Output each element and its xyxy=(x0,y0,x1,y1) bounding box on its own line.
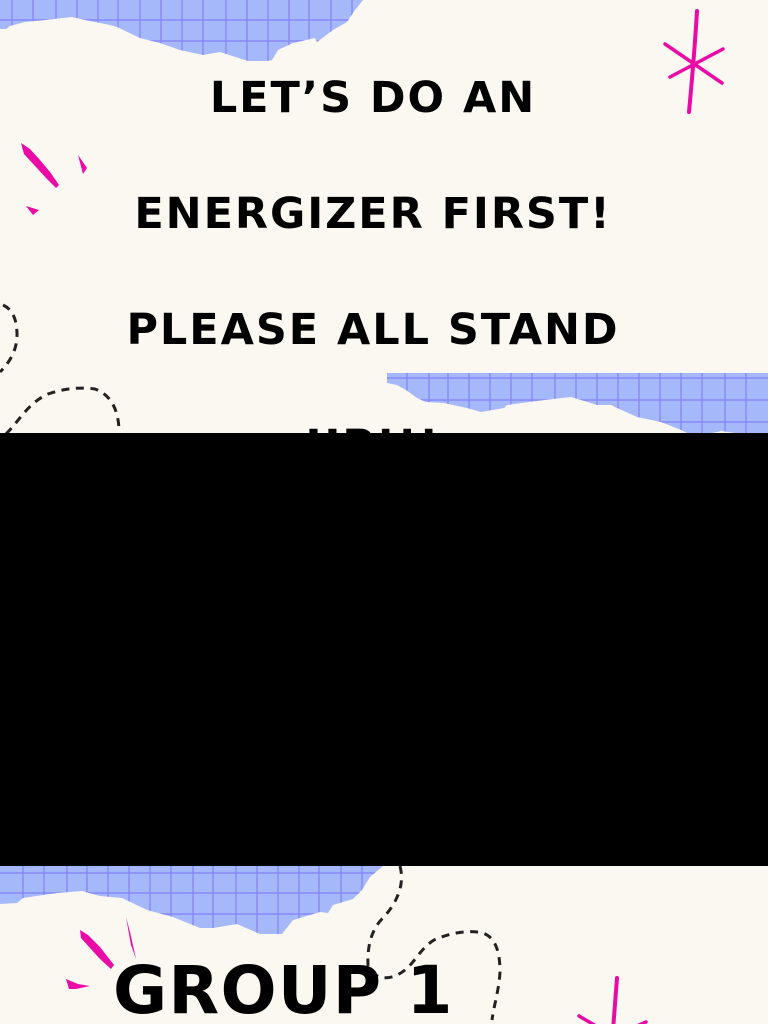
heading line 4: UP!!! xyxy=(305,421,440,471)
torn grid paper: bottom xyxy=(0,866,384,935)
heading line 2: ENERGIZER FIRST! xyxy=(134,189,612,239)
star: top right xyxy=(665,11,723,112)
heading line 1: LET’S DO AN xyxy=(210,73,536,123)
torn grid paper: top xyxy=(0,0,364,62)
black redacted band xyxy=(0,433,768,866)
dashed line: bottom xyxy=(368,866,500,1020)
dashed line: upper left xyxy=(0,305,119,434)
heading line 3: PLEASE ALL STAND xyxy=(126,305,620,355)
star: bottom right xyxy=(579,978,646,1024)
sparks: top left xyxy=(21,143,87,215)
sparks: bottom left xyxy=(66,917,136,989)
torn grid paper: middle xyxy=(387,373,768,433)
